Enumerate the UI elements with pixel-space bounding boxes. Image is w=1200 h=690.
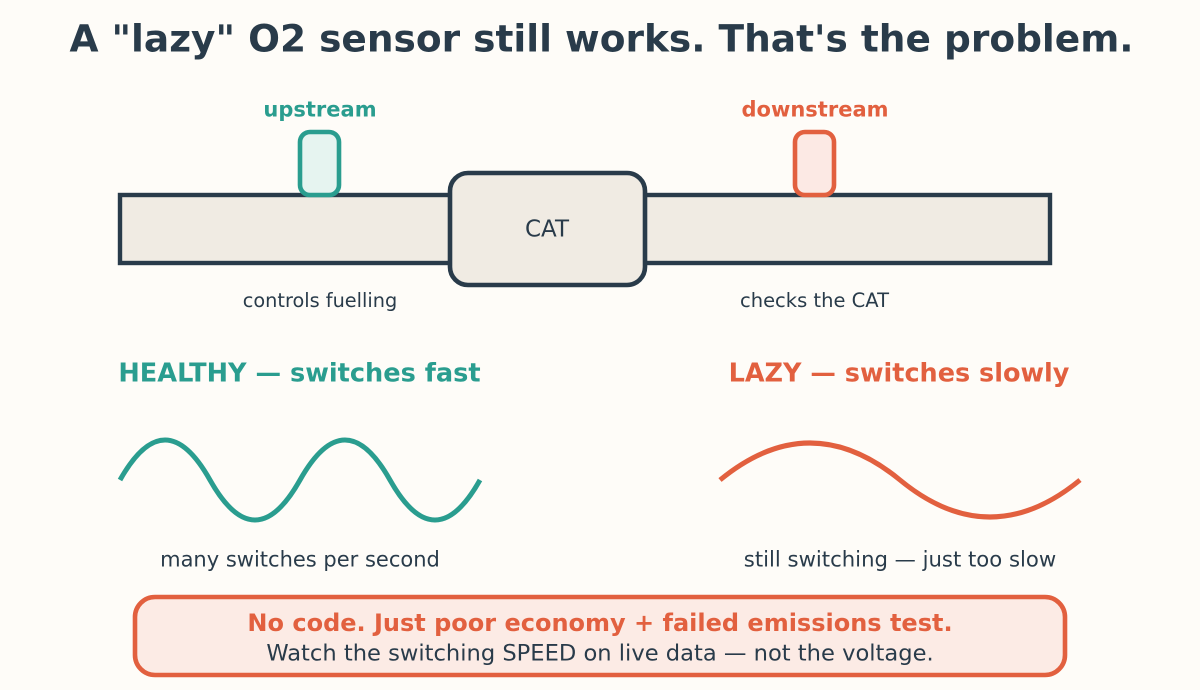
downstream sensor label: downstream bbox=[742, 98, 888, 122]
callout: Watch the switching SPEED on live data — not the voltage. bbox=[266, 640, 934, 666]
exhaust diagram bbox=[120, 98, 1050, 312]
healthy caption: many switches per second bbox=[160, 548, 440, 572]
lazy caption: still switching — just too slow bbox=[744, 546, 1056, 572]
callout bbox=[135, 597, 1065, 675]
healthy heading: HEALTHY — switches fast bbox=[118, 358, 481, 388]
lazy heading: LAZY — switches slowly bbox=[729, 358, 1070, 388]
callout: No code. Just poor economy + failed emissions test. bbox=[247, 609, 953, 637]
exhaust pipe bbox=[120, 195, 1050, 263]
icon: downstream sensor bbox=[795, 132, 834, 195]
title: A "lazy" O2 sensor still works. That's the problem. bbox=[69, 16, 1134, 60]
upstream caption: controls fuelling bbox=[243, 289, 397, 312]
downstream caption: checks the CAT bbox=[740, 289, 889, 312]
catalytic converter: CAT bbox=[525, 216, 570, 242]
chart: lazy slow wave bbox=[720, 443, 1080, 517]
icon: upstream sensor bbox=[300, 132, 339, 195]
chart: healthy fast wave bbox=[120, 440, 480, 520]
catalytic converter bbox=[450, 173, 645, 285]
upstream sensor label: upstream bbox=[263, 98, 377, 122]
